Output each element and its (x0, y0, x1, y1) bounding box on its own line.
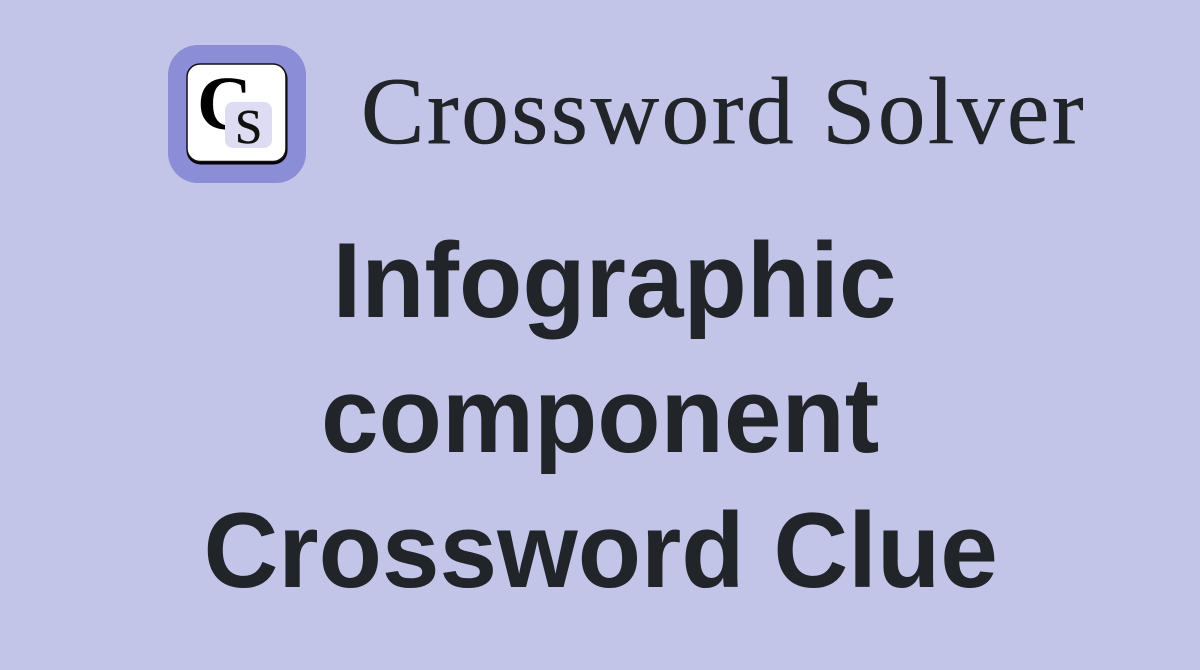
title (204, 225, 998, 610)
logo icon (168, 45, 306, 183)
logo icon: C (197, 62, 252, 146)
logo icon: S (235, 99, 262, 154)
title: Crossword Clue (204, 492, 998, 610)
title: component (321, 357, 879, 475)
title: Infographic (332, 225, 896, 340)
